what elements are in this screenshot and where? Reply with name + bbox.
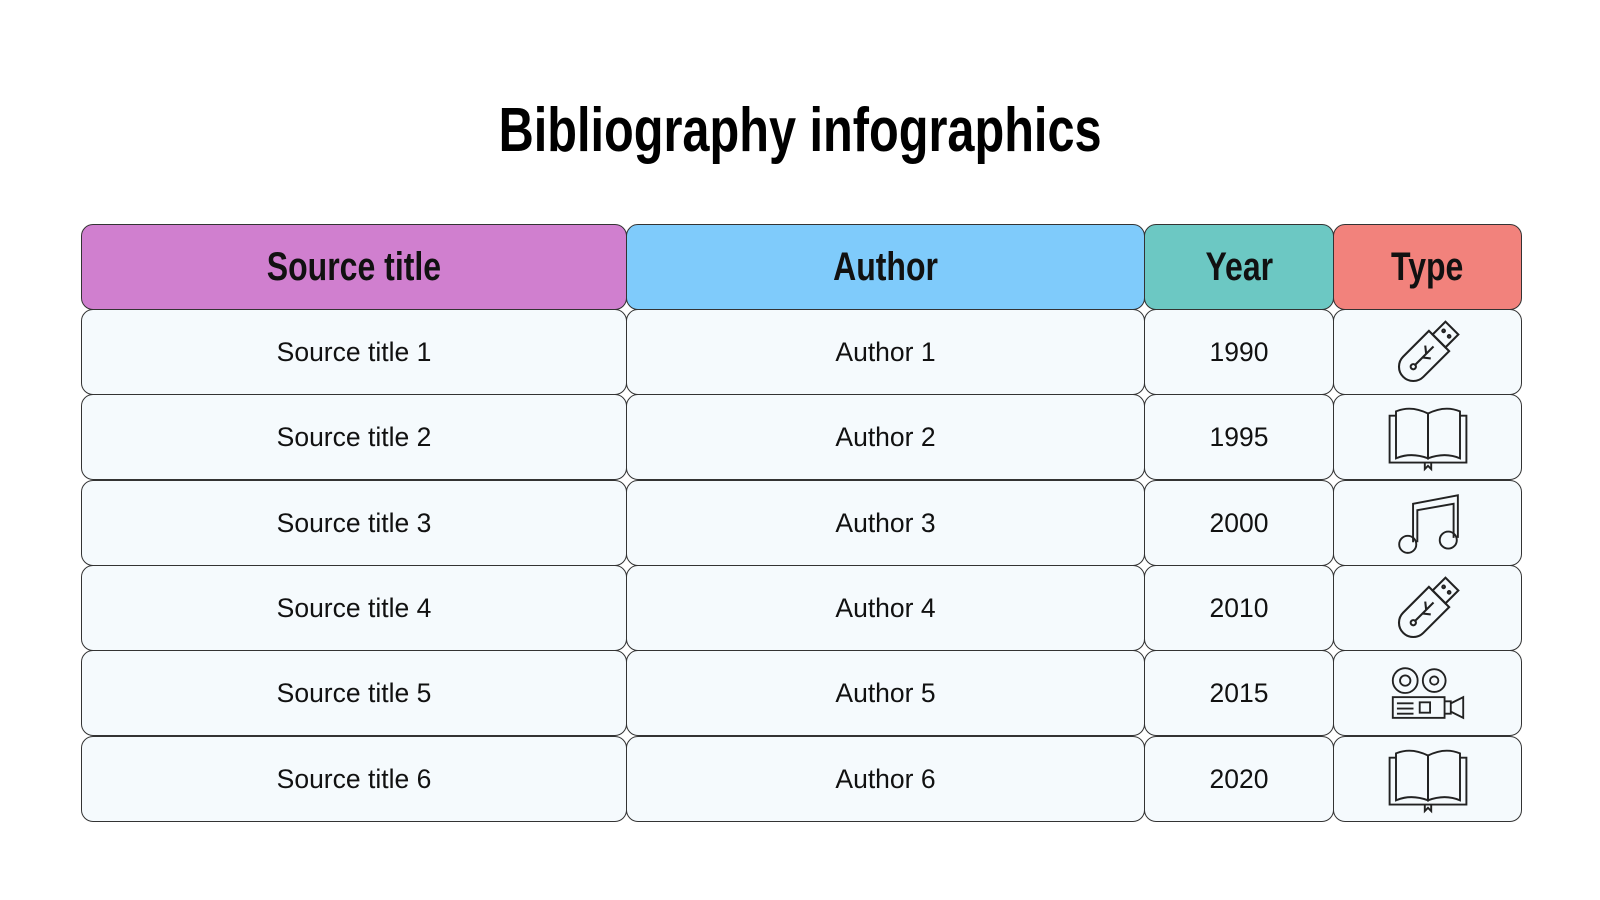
row 6: Source title 6	[277, 764, 431, 794]
header: type	[1333, 224, 1522, 310]
icon: usb	[1398, 320, 1460, 382]
row 3: 2000	[1210, 508, 1268, 538]
row 3	[81, 480, 1522, 566]
row 4: Author 4	[835, 592, 936, 622]
row 4	[81, 566, 1522, 650]
icon: film camera	[1392, 667, 1464, 720]
row 5	[81, 650, 1522, 736]
row 5: Source title 5	[277, 678, 431, 708]
row 2: Source title 2	[277, 422, 431, 452]
row 1: 1990	[1210, 336, 1268, 366]
header: source title	[81, 224, 627, 310]
row 4: Source title 4	[277, 592, 431, 622]
header: year	[1144, 224, 1334, 310]
row 2: 1995	[1210, 422, 1268, 452]
icon: book	[1388, 750, 1468, 814]
row 6: 2020	[1210, 764, 1268, 794]
row 3: Source title 3	[277, 508, 431, 538]
row 4: 2010	[1210, 592, 1268, 622]
header: year: Year	[1205, 244, 1273, 288]
icon: music	[1398, 494, 1459, 554]
header: author: Author	[833, 244, 938, 288]
row 3: Author 3	[835, 508, 936, 538]
row 5: Author 5	[835, 678, 936, 708]
header: type: Type	[1391, 244, 1464, 288]
row 5: 2015	[1210, 678, 1268, 708]
header: source title: Source title	[267, 244, 441, 288]
row 2: Author 2	[835, 422, 936, 452]
row 6: Author 6	[835, 764, 936, 794]
icon: usb	[1398, 576, 1460, 638]
row 1: Source title 1	[277, 336, 431, 366]
row 1	[81, 310, 1522, 394]
row 2	[81, 394, 1522, 480]
header: author	[626, 224, 1145, 310]
row 6	[81, 736, 1522, 822]
row 1: Author 1	[835, 336, 936, 366]
icon: book	[1388, 408, 1468, 472]
title: Bibliography infographics	[498, 96, 1101, 165]
